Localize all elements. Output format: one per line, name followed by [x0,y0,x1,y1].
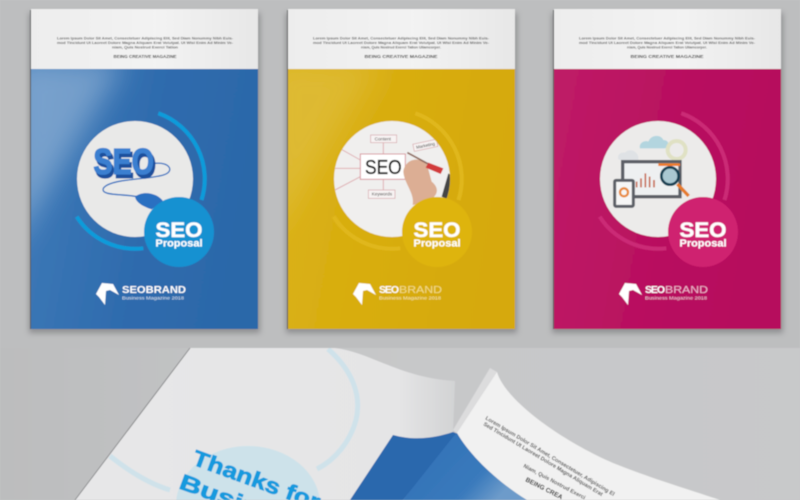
cover left edge [30,10,32,329]
lower accent arc [77,217,143,249]
back page artwork [110,349,358,500]
mind map box: marketing: Marketing [416,141,436,150]
header intro text: Lorem Ipsum Dolor Sit Amet, Consectetuer Adipiscing Elit, Sed Diam Nonummy Nibh Euis- [313,36,490,40]
cover glare [288,70,394,218]
3D SEO text shadow: SEO [95,144,156,185]
header intro text: niam, Quis Nostrud Exerci Tation [112,44,179,50]
illustration: 3D SEO and mouse [93,141,170,209]
illustration: SEO mind map and hand [335,135,453,205]
header intro text [579,36,756,50]
brand logo [619,283,708,305]
upper accent arc [158,113,205,200]
lower accent arc [600,217,666,249]
dark sleeve [442,173,453,200]
mind map connectors [335,143,383,190]
computer mouse [135,193,163,209]
back page sheet [75,348,455,500]
pale circle [176,446,320,500]
mind map box: content: Content [375,136,392,141]
image circle [77,121,193,237]
badge: SEO Proposal [668,197,738,267]
brand logo: SEO [645,284,665,296]
front cover blue panel [403,433,527,500]
brochure cover: pink [552,9,783,333]
open brochure: front cover [350,368,720,500]
cover header band [288,9,515,69]
header intro text [57,36,234,50]
front cover intro text: Sed Tincidunt Ut Laoreet Dolore Magna Aliquam Erat [482,422,604,498]
badge: SEO Proposal: Proposal [414,238,461,250]
badge: SEO Proposal: Proposal [156,238,203,250]
cover shadow [552,13,783,333]
hand [403,160,437,205]
header intro text: Lorem Ipsum Dolor Sit Amet, Consectetuer Adipiscing Elit, Sed Diam Nonummy Nibh Euis- [579,36,756,40]
header intro text: niam, Quis Nostrud Exerci Tation Ullamcorper. [627,44,707,50]
cover shadow [286,13,517,333]
tablet [615,180,633,206]
upper accent arc [415,113,462,200]
tablet donut chart [620,188,628,196]
grey cloud [618,150,638,160]
header magazine label: BEING CREATIVE MAGAZINE [630,54,704,59]
upper accent arc [681,113,728,200]
mouse cable [103,163,170,197]
illustration: analytics devices [615,136,689,206]
header magazine label: BEING CREATIVE MAGAZINE [114,54,176,59]
open brochure: back page [75,348,455,500]
central SEO box [360,154,405,179]
magnifier handle [677,184,689,196]
cover shadow [29,13,260,333]
marker stem [407,153,428,164]
cover colour body [288,69,515,329]
orange header strip [658,163,680,166]
gear [668,141,686,159]
cover colour body [554,69,781,329]
front cover intro text: Lorem Ipsum Dolor Sit Amet, Consectetuer, Adipiscing El [484,416,616,498]
badge: SEO Proposal [144,197,214,267]
image circle [334,121,450,237]
badge: SEO Proposal: SEO [680,219,726,242]
header intro text: niam, Quis Nostrud Exerci Tation Ullamcorper. [361,44,441,50]
brand logo: BRAND [399,284,442,296]
header intro text: mod Tincidunt Ut Laoreet Dolore Magna Aliquam Erat Volutpat. Ut Wisi Enim Ad Minim Ve- [57,40,234,45]
header intro text: mod Tincidunt Ut Laoreet Dolore Magna Aliquam Erat Volutpat. Ut Wisi Enim Ad Minim Ve- [579,40,756,45]
back page left edge [75,348,190,500]
badge: SEO Proposal: Proposal [680,238,727,250]
magnifier lens [661,167,679,185]
large pale arc [317,349,358,469]
cover glare [30,69,132,237]
3D SEO text: SEO [93,141,154,182]
brand logo: SEOBRAND [122,284,186,296]
brand logo: SEO [379,284,399,296]
cover left edge [553,10,555,329]
badge: SEO Proposal [402,197,472,267]
brochure cover: blue [11,9,260,333]
central SEO word: SEO [365,156,402,179]
image circle [600,121,716,237]
lower accent arc [334,217,400,249]
background: lower surface [0,348,456,500]
chart bars [637,173,654,187]
brand logo [96,283,186,305]
brand logo: Business Magazine 2018 [122,296,185,300]
header intro text: Lorem Ipsum Dolor Sit Amet, Consectetuer Adipiscing Elit, Sed Diam Nonummy Nibh Euis- [57,36,234,40]
mind map box: keywords: Keywords [372,192,393,197]
header magazine label: BEING CREATIVE MAGAZINE [364,54,438,59]
brand logo [353,283,442,305]
red marker [426,163,443,174]
brochure cover: yellow [268,9,517,333]
header intro text [313,36,490,50]
cover header band [554,9,781,69]
brand logo: Business Magazine 2018 [645,296,708,300]
inner blue panel [350,432,458,500]
badge: SEO Proposal: SEO [414,219,460,242]
small pale arc [110,456,170,490]
badge: SEO Proposal: SEO [156,219,202,242]
spine [453,368,497,434]
background: upper wall [0,0,800,348]
cover left edge [287,10,289,329]
brand logo: Business Magazine 2018 [379,296,442,300]
header intro text: mod Tincidunt Ut Laoreet Dolore Magna Aliquam Erat Volutpat. Ut Wisi Enim Ad Minim Ve- [313,40,490,45]
monitor [623,162,680,197]
cover header band [31,9,258,69]
teal cloud [640,136,668,148]
front cover white band [457,372,720,500]
cover colour body [31,69,258,329]
brand logo: BRAND [665,284,708,296]
